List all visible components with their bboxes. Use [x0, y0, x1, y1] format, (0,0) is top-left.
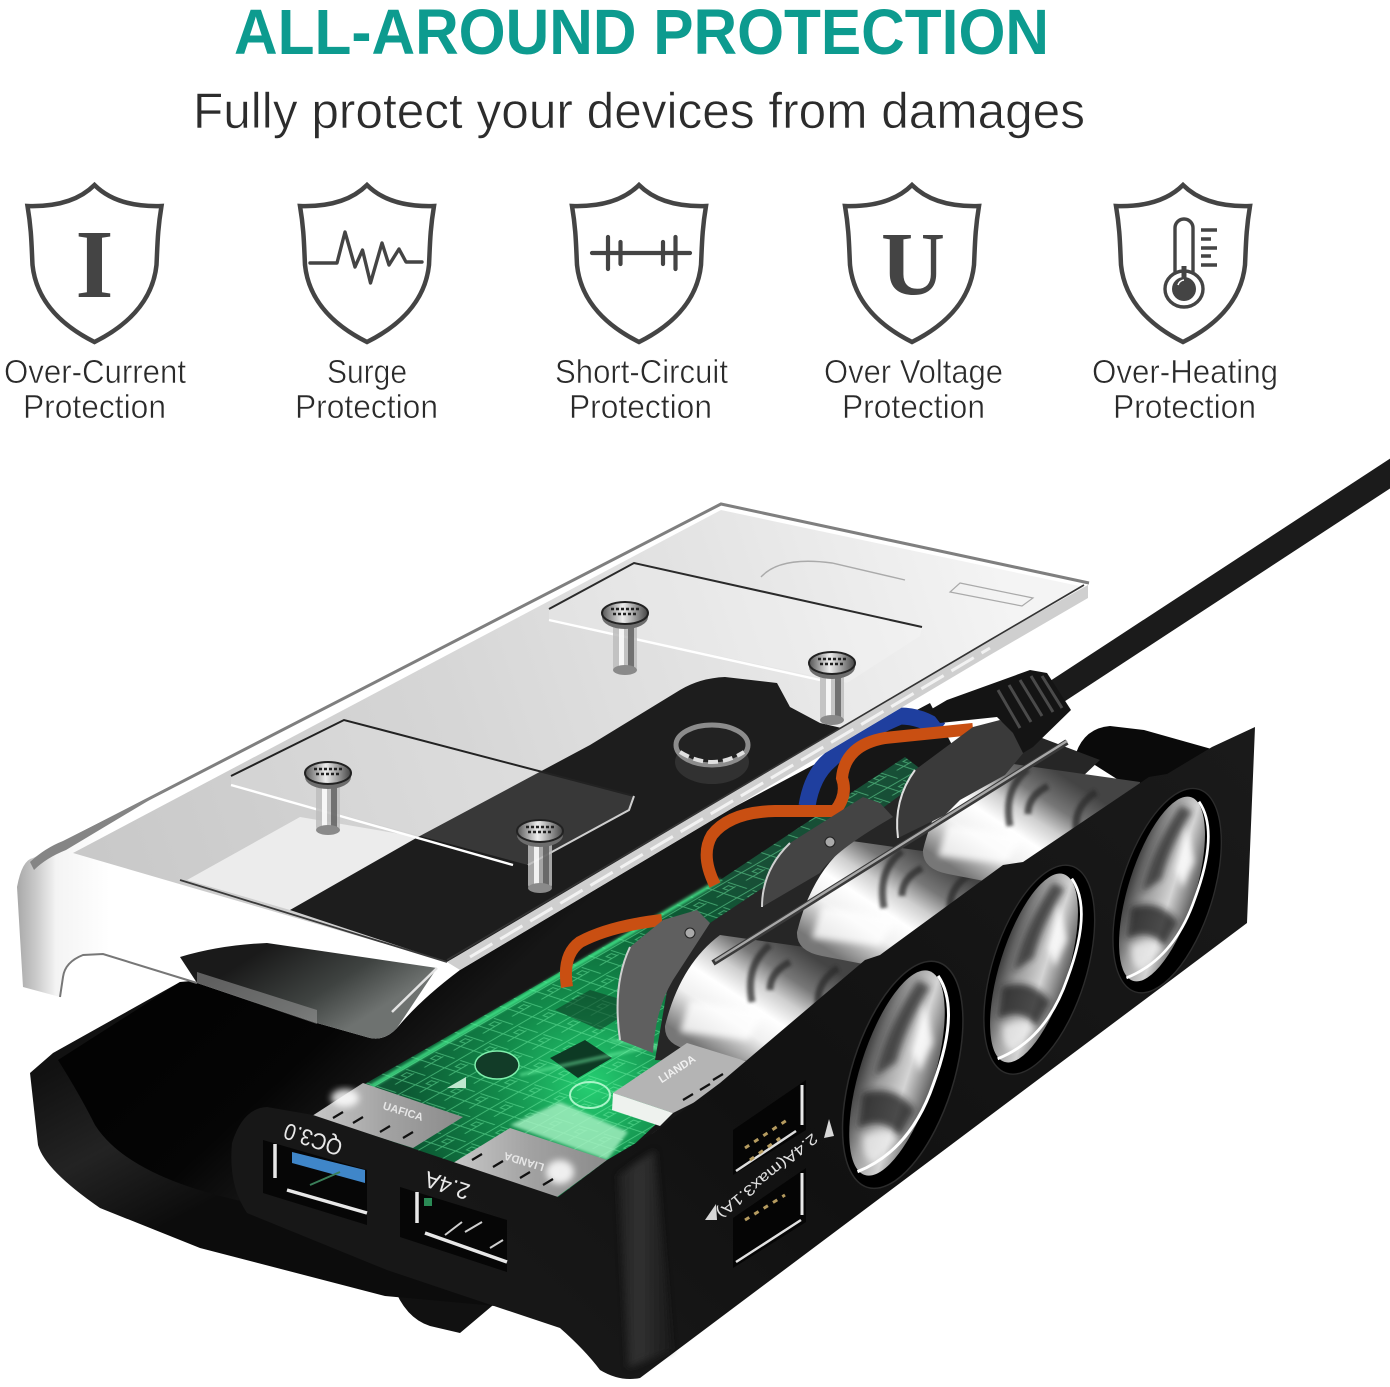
transparent lid	[17, 504, 1089, 1039]
socket: middle	[962, 852, 1117, 1087]
USB metal housings	[312, 1043, 765, 1197]
lid top surface	[73, 510, 1084, 962]
plug strain relief	[930, 670, 1071, 753]
dark cavity behind metal tubes	[655, 722, 1100, 1065]
label: 2.4A: 2.4A	[421, 1166, 473, 1205]
screws	[305, 602, 855, 893]
icon: shield with U: U	[881, 215, 945, 314]
blue wire	[807, 716, 940, 806]
end-face corner sheen	[618, 1150, 672, 1368]
power cable	[1050, 467, 1390, 696]
icon: shield with I	[28, 185, 162, 342]
label: over-current: Over-Current	[4, 353, 186, 390]
icon: shield with short circuit symbol	[572, 185, 706, 342]
protection item: over-heating	[1092, 185, 1278, 425]
metal socket tubes	[665, 759, 1140, 1062]
USB metal housings: LIANDA	[502, 1149, 546, 1173]
protection item: surge	[295, 185, 438, 425]
orange wire: lower	[566, 920, 662, 987]
USB port: 2.4A	[400, 1187, 507, 1272]
USB port: QC3.0	[263, 1140, 367, 1225]
label: short-circuit: Short-Circuit	[555, 353, 728, 390]
socket: far	[1091, 776, 1243, 1006]
mounting foot	[385, 1270, 505, 1333]
bracket plates	[618, 720, 1030, 1053]
product illustration: cutaway socket splitter	[17, 467, 1390, 1379]
front panel with sockets	[231, 727, 1255, 1379]
label: surge: Protection	[295, 388, 438, 425]
subtitle: Fully protect your devices from damages	[193, 83, 1085, 139]
protection item: short-circuit	[555, 185, 728, 425]
label: over voltage: Protection	[842, 388, 985, 425]
lid outer silhouette	[17, 504, 1089, 1039]
tray outer wall	[30, 982, 495, 1306]
lid left arch	[60, 954, 197, 997]
label: over-current: Protection	[23, 388, 166, 425]
icon: arrow top	[824, 1119, 834, 1138]
protection item: over-current	[4, 185, 186, 425]
icon: shield with thermometer	[1116, 185, 1250, 342]
lid back edge	[63, 504, 1089, 843]
interior dark cavity	[58, 703, 960, 1205]
circuit board	[320, 757, 935, 1197]
lid left rim shadow	[30, 783, 178, 870]
lid front edge strip	[447, 585, 1088, 970]
label: over-heating: Protection	[1113, 388, 1256, 425]
USB port: side upper	[733, 1080, 806, 1175]
metal rail	[713, 741, 1067, 963]
label: over-heating: Over-Heating	[1092, 353, 1278, 390]
label: over voltage: Over Voltage	[824, 353, 1003, 390]
protection item: over voltage	[824, 185, 1003, 425]
label: side USB rating: 2.4A(max3.1A)	[713, 1130, 821, 1221]
icon: shield with U	[845, 185, 979, 342]
lid ring	[675, 725, 749, 784]
raised plate: lower	[231, 720, 634, 865]
lid lower dark panel	[180, 943, 437, 1039]
orange wire: upper	[707, 729, 973, 885]
USB port: side lower	[733, 1168, 806, 1268]
dark interior seen through lid	[290, 677, 850, 962]
USB metal housings: LIANDA	[657, 1053, 698, 1086]
icon: shield with surge wave	[300, 185, 434, 342]
label: short-circuit: Protection	[569, 388, 712, 425]
rear bump behind panel	[1076, 726, 1215, 800]
label: QC3.0: QC3.0	[280, 1118, 346, 1161]
USB metal housings: UAFICA	[381, 1100, 425, 1124]
label: surge: Surge	[327, 353, 407, 390]
icon: arrow bottom	[705, 1204, 717, 1220]
socket: near	[819, 947, 987, 1203]
icon: shield with I: I	[75, 211, 114, 319]
raised plate: upper	[549, 561, 1033, 683]
